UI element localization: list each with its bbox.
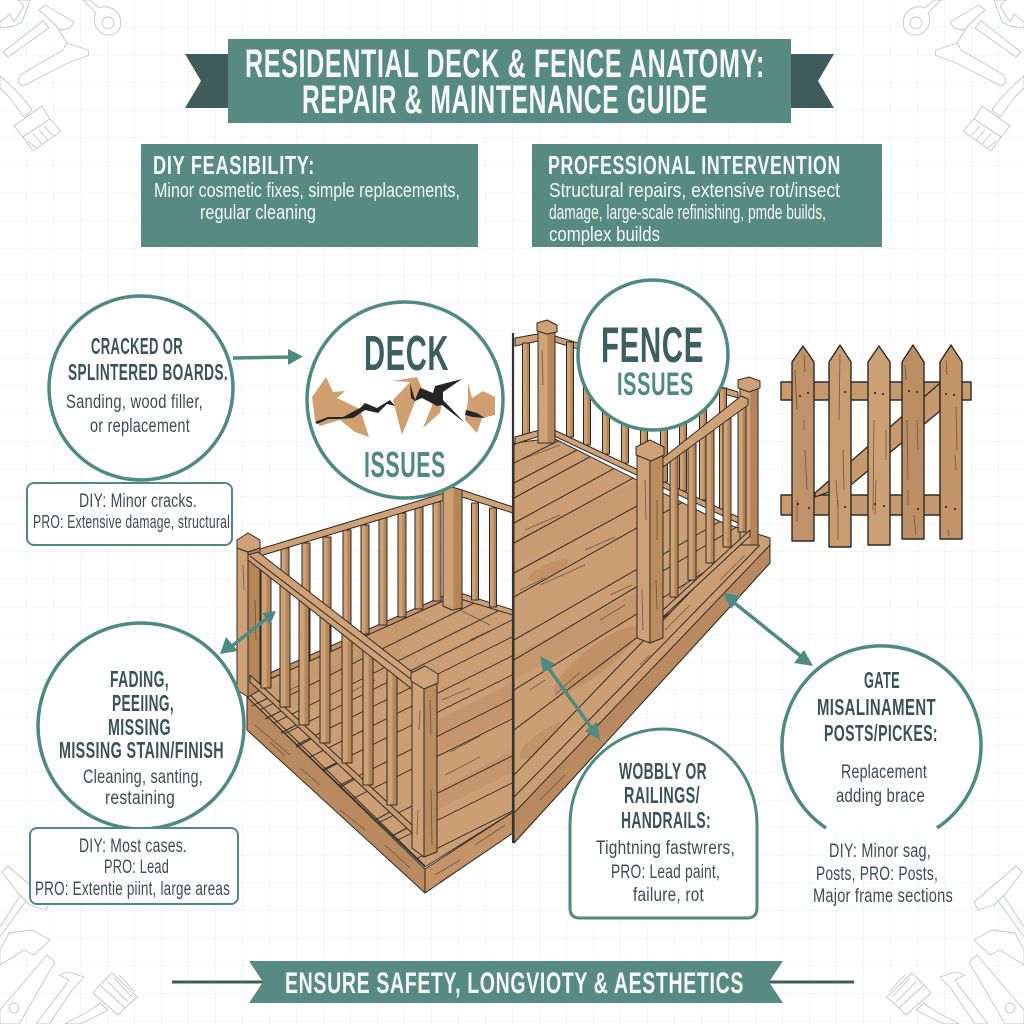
tools: bottom right xyxy=(887,866,1024,1024)
callout: cracked boards DIY/PRO: DIY: Minor cracks. xyxy=(79,491,197,512)
panel: professional intervention: damage, large-scale refinishing, pmde builds, xyxy=(549,202,826,224)
panel: wobbly railings: WOBBLY OR xyxy=(619,758,707,784)
tools: top left xyxy=(0,0,121,151)
arrow: gate to fascia xyxy=(723,593,813,666)
callout: cracked boards DIY/PRO xyxy=(27,483,232,545)
panel: gate misalignment: adding brace xyxy=(836,786,925,807)
panel: gate misalignment: POSTS/PICKES: xyxy=(824,720,938,746)
title banner xyxy=(185,39,834,123)
panel: gate misalignment: Replacement xyxy=(841,762,927,783)
panel: fence issues circle: FENCE xyxy=(601,317,704,373)
panel: deck issues circle xyxy=(307,302,503,498)
panel: cracked or splintered boards: or replacement xyxy=(90,416,190,437)
panel: fading peeling stain: PEEIING, xyxy=(112,690,174,716)
panel: fading peeling stain xyxy=(38,623,244,829)
panel: deck issues circle: ISSUES xyxy=(364,444,446,485)
panel: fence issues circle: ISSUES xyxy=(617,366,694,402)
callout: fading DIY/PRO: DIY: Most cases. xyxy=(79,836,187,857)
panel: wobbly railings xyxy=(570,729,757,918)
panel: DIY feasibility: Minor cosmetic fixes, simple replacements, xyxy=(154,180,460,202)
panel: wobbly railings: PRO: Lead paint, xyxy=(611,862,720,883)
arrow: cracked boards to deck xyxy=(233,349,303,365)
footer banner xyxy=(172,961,854,1003)
arrow: wobbly railings to deck floor xyxy=(540,656,600,740)
panel: gate misalignment: Major frame sections xyxy=(813,886,953,907)
divider between deck and fence sides xyxy=(512,333,514,843)
panel: fading peeling stain: restaining xyxy=(105,788,175,809)
panel: wobbly railings: failure, rot xyxy=(633,885,704,906)
panel: DIY feasibility xyxy=(141,144,478,247)
panel: cracked or splintered boards xyxy=(49,296,233,480)
deck illustration: right side xyxy=(514,320,770,843)
panel: cracked or splintered boards: SPLINTERED BOARDS. xyxy=(68,359,228,385)
panel: professional intervention xyxy=(532,144,882,247)
panel: professional intervention: PROFESSIONAL INTERVENTION xyxy=(548,150,841,180)
panel: professional intervention: complex builds xyxy=(549,224,660,246)
panel: gate misalignment: GATE xyxy=(864,667,900,693)
panel: fading peeling stain: Cleaning, santing, xyxy=(83,767,203,788)
panel: cracked or splintered boards: Sanding, wood filler, xyxy=(66,392,203,413)
panel: fading peeling stain: MISSING xyxy=(108,714,171,740)
panel: professional intervention: Structural repairs, extensive rot/insect xyxy=(549,180,840,202)
fence panel illustration xyxy=(781,345,971,547)
panel: gate misalignment: DIY: Minor sag, xyxy=(829,841,931,862)
panel: gate misalignment: MISALINAMENT xyxy=(817,694,936,720)
panel: wobbly railings: HANDRAILS: xyxy=(621,807,711,833)
panel: cracked or splintered boards: CRACKED OR xyxy=(91,333,183,359)
panel: gate misalignment: Posts, PRO: Posts, xyxy=(816,864,938,885)
panel: wobbly railings: Tightning fastwrers, xyxy=(596,838,735,859)
panel: wobbly railings: RAILINGS/ xyxy=(624,782,700,808)
deck illustration: left side xyxy=(236,487,512,894)
tools: top right xyxy=(903,0,1024,151)
callout: fading DIY/PRO xyxy=(30,828,238,904)
icon: cracked board pieces xyxy=(312,377,495,437)
tools: bottom left xyxy=(0,866,137,1024)
panel: fading peeling stain: MISSING STAIN/FINISH xyxy=(59,737,224,763)
title banner: REPAIR & MAINTENANCE GUIDE xyxy=(302,78,708,122)
panel: DIY feasibility: regular cleaning xyxy=(200,202,316,224)
panel: fading peeling stain: FADING, xyxy=(110,666,169,692)
panel: deck issues circle: DECK xyxy=(364,327,449,381)
panel: gate misalignment xyxy=(782,646,981,907)
callout: fading DIY/PRO: PRO: Extentie piint, large areas xyxy=(35,879,230,900)
panel: fence issues circle xyxy=(578,280,728,430)
arrow: fading to railing xyxy=(220,611,276,654)
callout: fading DIY/PRO: PRO: Lead xyxy=(104,857,169,878)
callout: cracked boards DIY/PRO: PRO: Extensive damage, structural xyxy=(33,512,230,532)
footer banner: ENSURE SAFETY, LONGVIOTY & AESTHETICS xyxy=(285,967,744,1000)
panel: DIY feasibility: DIY FEASIBILITY: xyxy=(153,150,315,180)
